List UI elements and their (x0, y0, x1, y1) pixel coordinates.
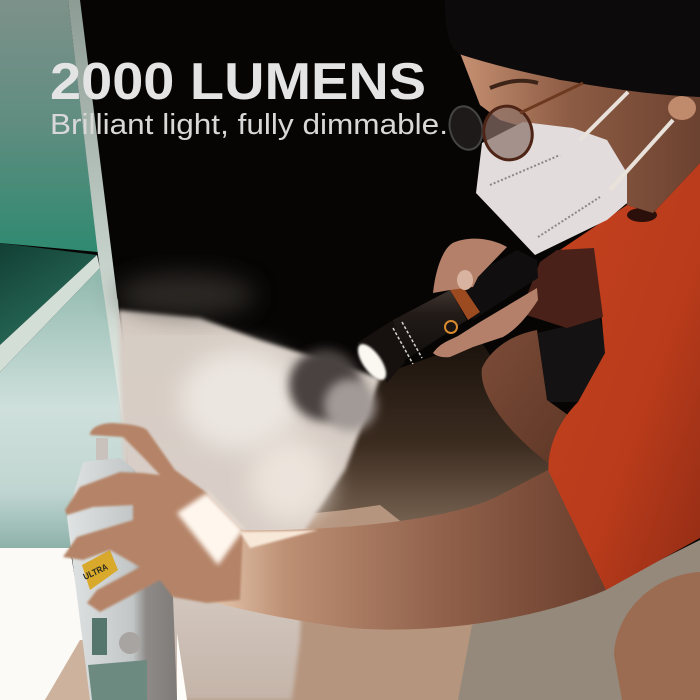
face mask (476, 92, 673, 255)
forearm holding can (205, 470, 606, 630)
dark ground lit by the beam (310, 340, 560, 530)
shirt (548, 163, 700, 590)
spray can: ULTRA (82, 562, 110, 582)
shirt collar shadow (627, 208, 657, 222)
spray can (67, 438, 187, 700)
beanie (445, 0, 700, 97)
hand on spray can (63, 423, 318, 612)
knee (482, 330, 575, 466)
hand gripping the flashlight (433, 239, 538, 357)
glasses (445, 83, 583, 165)
person (205, 0, 700, 700)
concrete floor (150, 505, 700, 700)
teal cabinet on the left (0, 0, 130, 700)
face and neck (460, 53, 700, 213)
headline: 2000 LUMENS: 2000 LUMENS (50, 53, 426, 111)
lower leg (614, 572, 700, 700)
ear (668, 96, 696, 120)
subheading: Brilliant light, fully dimmable. (50, 109, 448, 141)
can label (82, 550, 118, 590)
flashlight held in the hand (353, 250, 538, 384)
eyebrow (490, 81, 538, 88)
smoke cloud in the flashlight beam (115, 273, 380, 700)
tattooed upper arm (520, 248, 603, 328)
shorts (538, 318, 607, 402)
